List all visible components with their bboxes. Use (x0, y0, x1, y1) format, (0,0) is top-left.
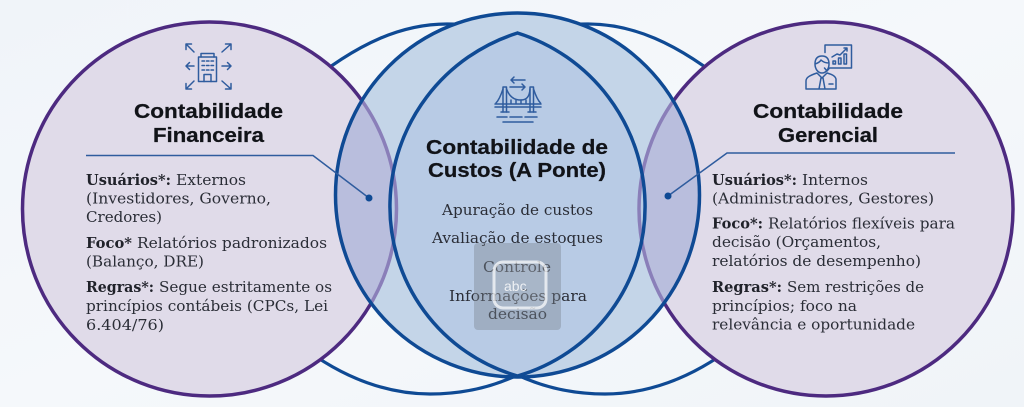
text: gerencial details: Regras*: (712, 278, 782, 296)
text: financeira details (86, 171, 332, 334)
text: gerencial details (712, 171, 955, 334)
heading: contabilidade gerencial: Gerencial (778, 125, 878, 147)
heading: contabilidade gerencial: Contabilidade (753, 101, 903, 123)
circle: financeira background (22, 22, 396, 396)
text: custos list: Avaliação de estoques (431, 229, 603, 247)
heading: contabilidade de custos: Contabilidade de (426, 137, 608, 159)
leader line: financeira (86, 156, 372, 202)
text: financeira details: princípios contábeis (CPCs, Lei (86, 297, 328, 315)
text: financeira details: Externos (176, 171, 246, 189)
blue circle outlines (336, 13, 700, 377)
text: gerencial details: relevância e oportunidade (712, 316, 915, 334)
text: custos list: Informações para (449, 287, 587, 305)
icon: bridge (495, 77, 541, 122)
heading: contabilidade gerencial (753, 101, 903, 147)
icon: building with arrows (186, 44, 231, 89)
icon: manager with chart (806, 45, 852, 89)
text: financeira details: Relatórios padronizados (137, 234, 327, 252)
text: gerencial details: Relatórios flexíveis para (768, 214, 955, 232)
text: financeira details: (Balanço, DRE) (86, 252, 204, 270)
text: gerencial details: (Administradores, Gestores) (712, 190, 934, 208)
central lens (390, 33, 645, 376)
text: custos list (431, 201, 603, 323)
overlap left (337, 104, 392, 300)
text: financeira details: Credores) (86, 208, 162, 226)
text: custos list: decisão (488, 305, 547, 323)
text: financeira details: Regras*: (86, 278, 154, 296)
overlay: text recognition badge (474, 243, 561, 330)
text: gerencial details: Foco*: (712, 214, 763, 232)
text: financeira details: (Investidores, Governo, (86, 190, 271, 208)
overlap right (644, 104, 698, 300)
circle: gerencial background (639, 22, 1013, 396)
text: financeira details: Segue estritamente os (159, 278, 332, 296)
text: custos list: Controle (483, 258, 551, 276)
text: financeira details: 6.404/76) (86, 316, 164, 334)
overlay: text recognition badge: abc (504, 278, 527, 294)
text: gerencial details: Usuários*: (712, 171, 797, 189)
text: gerencial details: decisão (Orçamentos, (712, 233, 881, 251)
text: gerencial details: relatórios de desempenho) (712, 252, 921, 270)
text: gerencial details: princípios; foco na (712, 297, 857, 315)
heading: contabilidade de custos (426, 137, 608, 182)
overlap lens tips (362, 100, 674, 303)
text: gerencial details: Internos (802, 171, 868, 189)
leader line: gerencial (664, 153, 955, 200)
text: gerencial details: Sem restrições de (787, 278, 924, 296)
text: financeira details: Usuários*: (86, 171, 171, 189)
text: custos list: Apuração de custos (441, 201, 593, 219)
heading: contabilidade financeira: Financeira (153, 125, 265, 147)
outer arcs of the bridge circles (300, 24, 735, 394)
heading: contabilidade financeira: Contabilidade (134, 101, 283, 123)
text: financeira details: Foco* (86, 234, 132, 252)
heading: contabilidade de custos: Custos (A Ponte) (428, 160, 606, 182)
circle: custos background (336, 13, 700, 377)
heading: contabilidade financeira (134, 101, 283, 147)
